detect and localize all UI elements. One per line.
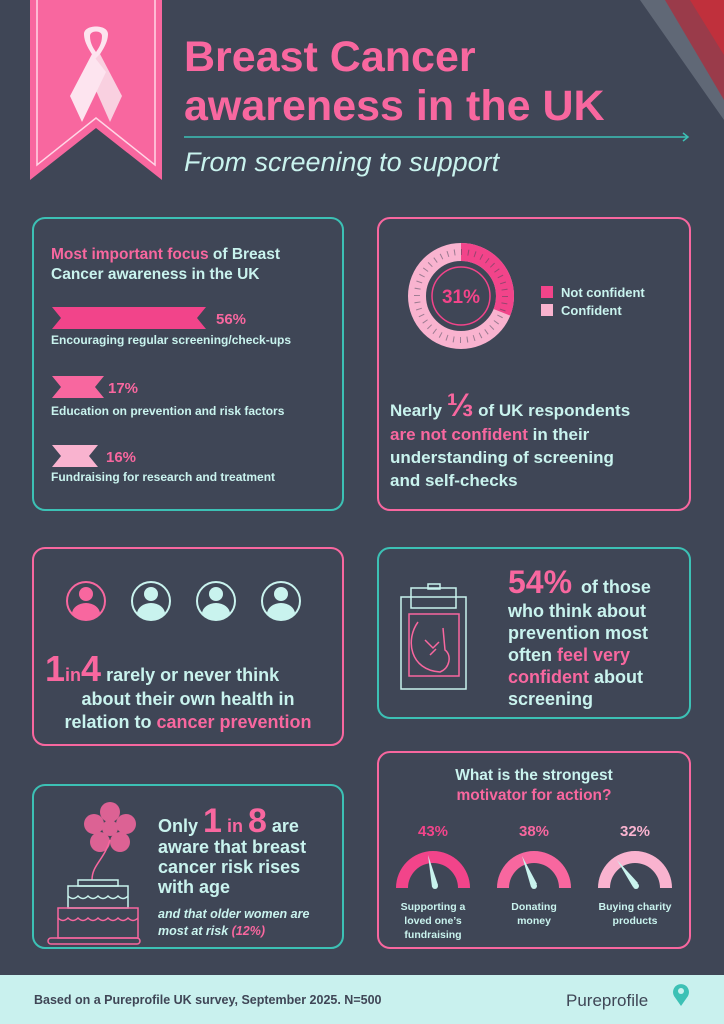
statement xyxy=(45,648,312,732)
title: awareness in the UK xyxy=(184,82,605,130)
gauge: 43%: Supporting a xyxy=(401,901,466,913)
gauge: 43%: fundraising xyxy=(404,929,462,941)
statement: aware that breast xyxy=(158,837,306,857)
bar: 16%: 16% xyxy=(106,449,136,466)
statement: who think about xyxy=(507,601,646,621)
donut chart xyxy=(417,252,505,340)
icon: cake with flower xyxy=(48,802,140,944)
footer xyxy=(0,975,724,1024)
panel: 1 in 8 xyxy=(33,785,343,948)
logo: Pureprofile xyxy=(566,984,689,1010)
gauge: 38%: 38% xyxy=(519,823,549,840)
statement: and that older women are xyxy=(158,907,309,921)
statement: Only 1 in 8 are xyxy=(158,802,299,840)
statement: cancer risk rises xyxy=(158,857,300,877)
title xyxy=(184,33,605,130)
panel: most important focus: Most important focus of Breast xyxy=(51,246,280,263)
gauge: 38% xyxy=(497,823,571,927)
legend: Not confident xyxy=(561,285,645,300)
statement: 1in4 rarely or never think xyxy=(45,648,280,689)
arrow divider xyxy=(184,133,688,141)
statement: are not confident in their xyxy=(390,425,590,444)
legend: Confident xyxy=(561,303,622,318)
statement: and self-checks xyxy=(390,471,518,490)
gauge: 38%: money xyxy=(517,915,551,927)
ribbon banner xyxy=(30,0,162,180)
gauge: 43% xyxy=(396,823,470,941)
gauge: 32% xyxy=(598,823,672,927)
logo: Pureprofile: Pureprofile xyxy=(566,991,648,1010)
flag corner decoration xyxy=(640,0,724,120)
legend xyxy=(541,285,645,318)
icon: clipboard mammogram xyxy=(401,584,466,689)
statement: 54% of those xyxy=(508,564,651,600)
statement: screening xyxy=(508,689,593,709)
panel: most important focus xyxy=(33,218,343,510)
statement xyxy=(507,564,651,709)
statement: understanding of screening xyxy=(390,448,614,467)
bar: 16% xyxy=(51,445,275,484)
bar: 56% xyxy=(51,307,291,347)
bar: 56%: 56% xyxy=(216,311,246,328)
gauge: 43%: 43% xyxy=(418,823,448,840)
donut chart: 31% xyxy=(442,287,480,308)
panel: strongest motivator: What is the strongest xyxy=(455,767,613,784)
gauge: 32%: products xyxy=(613,915,658,927)
footer: Based on a Pureprofile UK survey, September 2025. N=500 xyxy=(34,993,382,1007)
icon: pink ribbon xyxy=(70,26,122,122)
bar: 16%: Fundraising for research and treatment xyxy=(51,470,275,484)
subtitle: From screening to support xyxy=(184,147,501,177)
gauge: 43%: loved one’s xyxy=(404,915,462,927)
panel: most important focus: Cancer awareness in the UK xyxy=(51,266,260,283)
gauge: 38%: Donating xyxy=(511,901,557,913)
statement: with age xyxy=(157,877,230,897)
icons: people xyxy=(67,582,300,620)
statement: often feel very xyxy=(508,645,630,665)
bar: 17%: Education on prevention and risk factors xyxy=(51,404,285,418)
statement: prevention most xyxy=(508,623,648,643)
statement: confident about xyxy=(508,667,643,687)
statement: most at risk (12%) xyxy=(158,924,265,938)
bar: 17%: 17% xyxy=(108,380,138,397)
gauge: 32%: Buying charity xyxy=(599,901,672,913)
statement: Nearly ⅓ of UK respondents xyxy=(390,387,630,423)
title: Breast Cancer xyxy=(184,33,476,81)
statement xyxy=(157,802,309,938)
gauge: 32%: 32% xyxy=(620,823,650,840)
panel: strongest motivator: motivator for action? xyxy=(456,787,612,804)
panel: confidence xyxy=(378,218,690,510)
bar: 56%: Encouraging regular screening/check-ups xyxy=(51,333,291,347)
panel: 54% xyxy=(378,548,690,718)
panel: 1 in 4 xyxy=(33,548,343,745)
statement: about their own health in xyxy=(82,689,294,709)
bar: 17% xyxy=(51,376,285,418)
panel: strongest motivator xyxy=(378,752,690,948)
statement xyxy=(390,387,630,490)
statement: relation to cancer prevention xyxy=(64,712,312,732)
